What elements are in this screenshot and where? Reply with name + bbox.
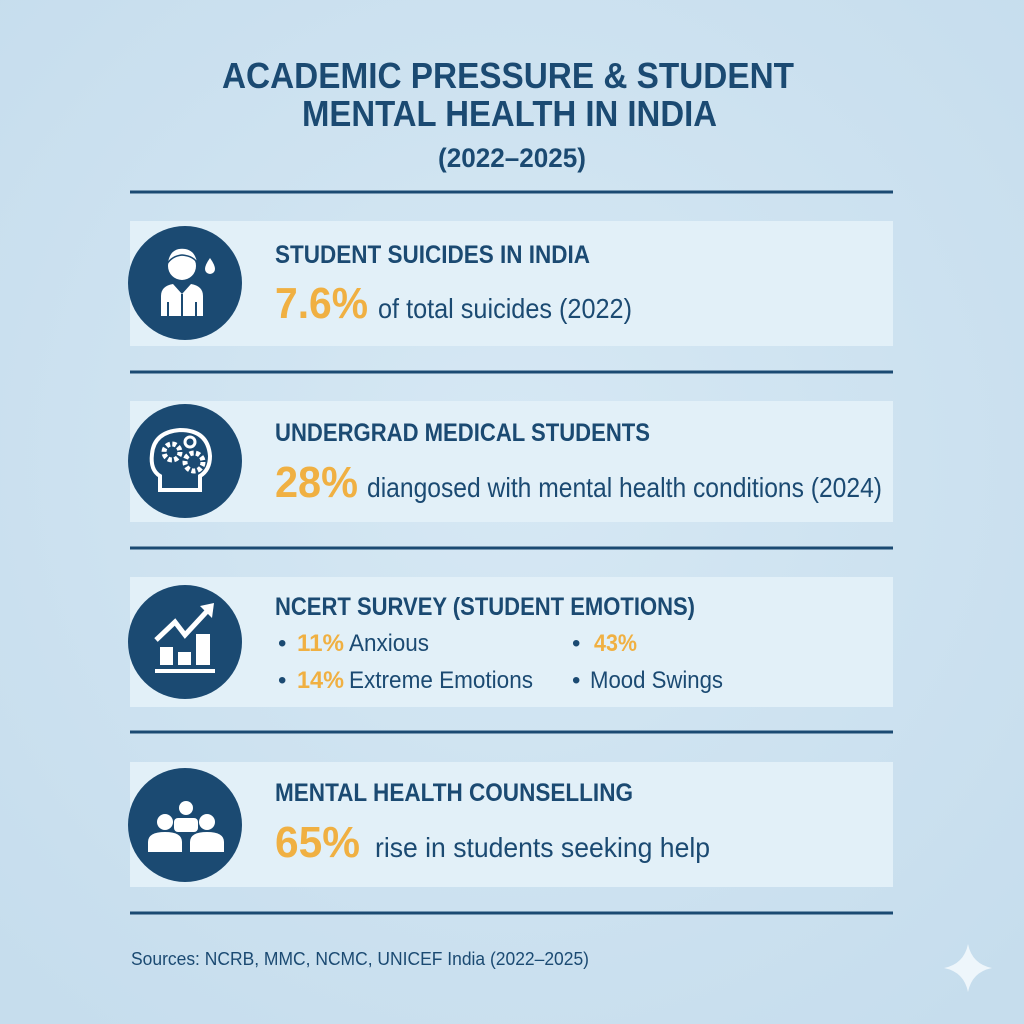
stat: diangosed with mental health conditions (2024) xyxy=(367,472,882,503)
title xyxy=(222,55,794,173)
heading: UNDERGRAD MEDICAL STUDENTS xyxy=(275,419,650,447)
panel: counselling xyxy=(128,762,893,887)
stat: rise in students seeking help xyxy=(375,832,710,863)
stat xyxy=(275,279,632,328)
bullets: 43% xyxy=(594,630,637,657)
title: (2022–2025) xyxy=(438,143,586,173)
stat: of total suicides (2022) xyxy=(378,293,632,324)
heading: NCERT SURVEY (STUDENT EMOTIONS) xyxy=(275,593,695,621)
panel: student suicides xyxy=(128,221,893,346)
sources: Sources: NCRB, MMC, NCMC, UNICEF India (2022–2025) xyxy=(131,949,589,969)
icon: rising chart xyxy=(128,585,242,699)
bullets: • xyxy=(278,667,286,694)
stat: 28% xyxy=(275,458,358,507)
bullets: Mood Swings xyxy=(590,667,723,694)
icon: sparkle xyxy=(944,944,992,992)
heading: MENTAL HEALTH COUNSELLING xyxy=(275,779,633,807)
title: ACADEMIC PRESSURE & STUDENT xyxy=(222,55,794,96)
stat: 7.6% xyxy=(275,279,368,328)
stat xyxy=(275,818,710,867)
icon: head with gears xyxy=(128,404,242,518)
bullets: Extreme Emotions xyxy=(349,667,533,694)
heading: STUDENT SUICIDES IN INDIA xyxy=(275,241,590,269)
bullets: • xyxy=(572,630,580,657)
bullets: 11% xyxy=(297,630,344,657)
panel: medical students xyxy=(128,401,893,522)
icon: student with tear xyxy=(128,226,242,340)
icon: group xyxy=(128,768,242,882)
bullets: Anxious xyxy=(349,630,429,657)
bullets: • xyxy=(278,630,286,657)
bullets xyxy=(278,630,723,694)
title: MENTAL HEALTH IN INDIA xyxy=(302,93,717,134)
stat xyxy=(275,458,882,507)
bullets: 14% xyxy=(297,667,344,694)
panel: NCERT survey xyxy=(128,577,893,707)
bullets: • xyxy=(572,667,580,694)
stat: 65% xyxy=(275,818,360,867)
